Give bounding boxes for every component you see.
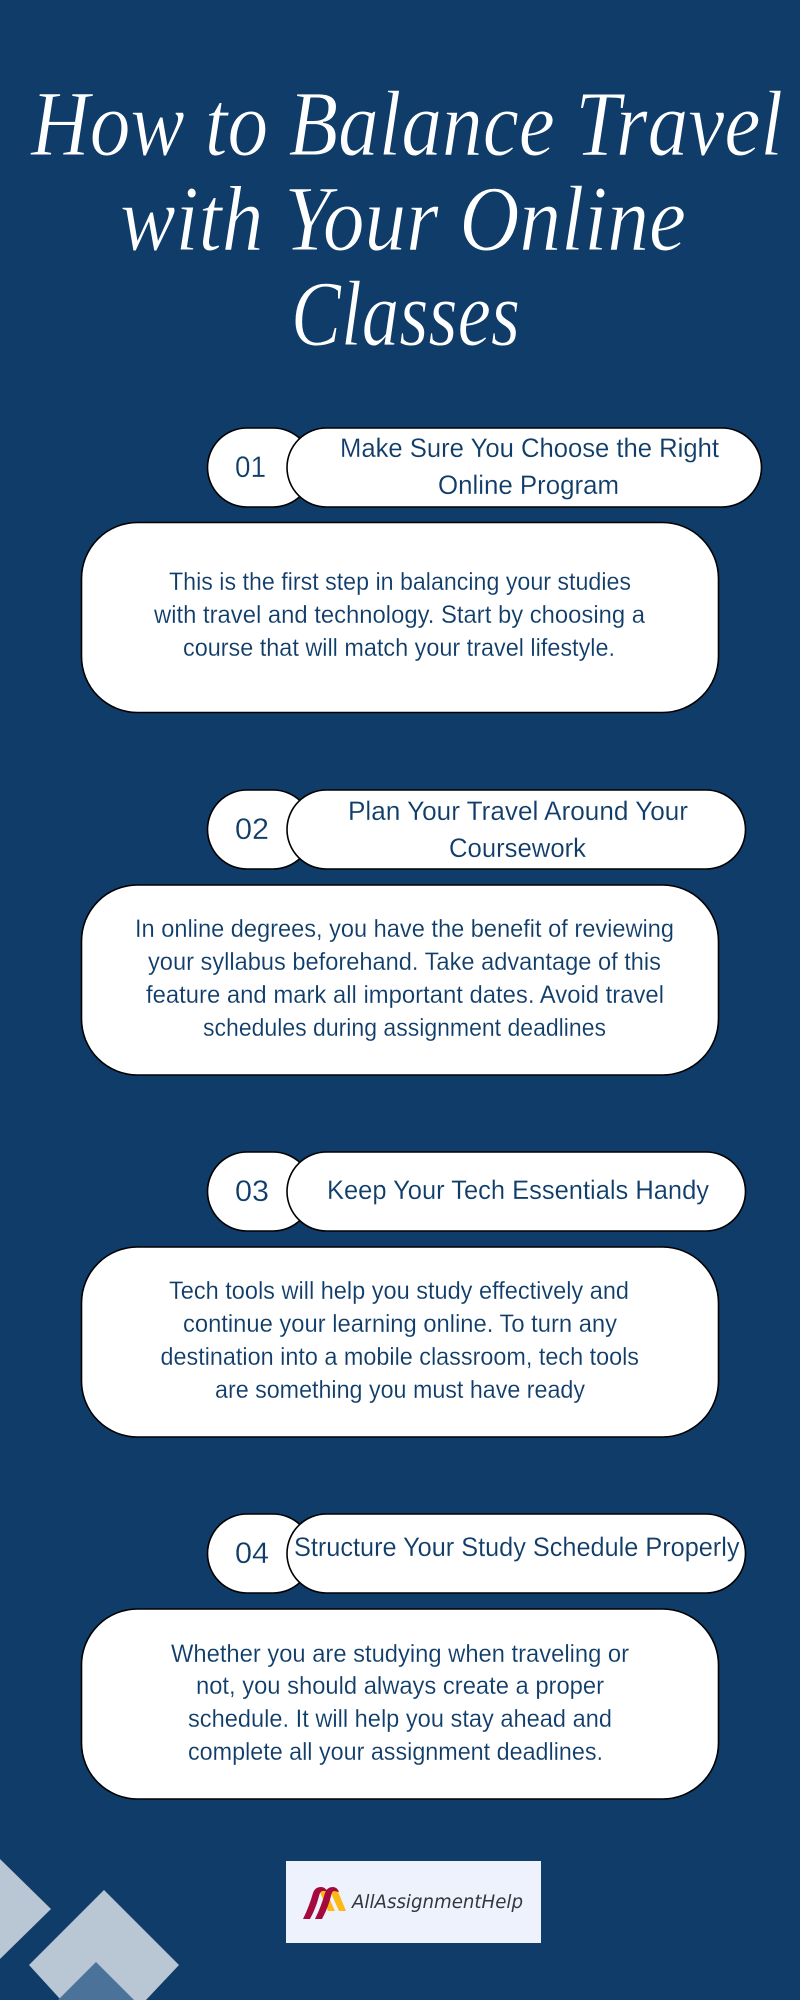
icon: logo mark — [303, 1887, 346, 1919]
body card 03: Tech tools will help you study effectively and — [169, 1277, 629, 1305]
body card 02: In online degrees, you have the benefit of reviewing — [135, 915, 674, 943]
body card 03: destination into a mobile classroom, tech tools — [160, 1343, 639, 1371]
body card 04: not, you should always create a proper — [196, 1672, 604, 1700]
body card 04: complete all your assignment deadlines. — [188, 1738, 603, 1766]
body card 04: schedule. It will help you stay ahead and — [188, 1705, 612, 1733]
body card 01: This is the first step in balancing your studies — [169, 568, 631, 596]
number badge 01: 01 — [235, 451, 266, 484]
heading pill 01: Online Program — [438, 470, 619, 500]
number badge 02 — [208, 790, 312, 869]
panel: step 04 — [82, 1514, 746, 1799]
body card 02 — [82, 885, 718, 1075]
title: Classes — [291, 263, 520, 366]
body card 04 — [82, 1609, 718, 1799]
number badge 04 — [208, 1514, 312, 1593]
number badge 04: 04 — [235, 1537, 269, 1570]
heading pill 04 — [287, 1514, 746, 1593]
heading pill 02 — [287, 790, 746, 869]
body card 02: schedules during assignment deadlines — [203, 1014, 606, 1042]
body card 03: are something you must have ready — [215, 1376, 585, 1404]
body card 03: continue your learning online. To turn any — [183, 1310, 617, 1338]
number badge 02: 02 — [235, 813, 269, 846]
heading pill 03 — [287, 1152, 746, 1231]
panel: step 03 — [82, 1152, 746, 1437]
decorative corner shapes — [0, 1859, 179, 2000]
heading pill 04: Structure Your Study Schedule Properly — [294, 1532, 740, 1562]
logo: AllAssignmentHelp: AllAssignmentHelp — [350, 1891, 523, 1913]
body card 02: feature and mark all important dates. Avoid travel — [146, 981, 664, 1009]
heading pill 02: Plan Your Travel Around Your — [348, 796, 688, 826]
panel: step 01 — [82, 428, 762, 712]
heading pill 01 — [287, 428, 762, 507]
panel: step 02 — [82, 790, 746, 1075]
body card 02: your syllabus beforehand. Take advantage of this — [148, 948, 661, 976]
number badge 01 — [208, 428, 312, 507]
title — [30, 73, 783, 366]
body card 01 — [82, 522, 718, 712]
body card 03 — [82, 1247, 718, 1437]
heading pill 03: Keep Your Tech Essentials Handy — [327, 1175, 709, 1205]
heading pill 01: Make Sure You Choose the Right — [340, 433, 719, 463]
body card 04: Whether you are studying when traveling or — [171, 1640, 629, 1668]
number badge 03: 03 — [235, 1175, 269, 1208]
heading pill 02: Coursework — [449, 833, 586, 863]
logo: AllAssignmentHelp — [286, 1861, 541, 1943]
body card 01: with travel and technology. Start by choosing a — [153, 601, 645, 629]
number badge 03 — [208, 1152, 312, 1231]
title: with Your Online — [120, 168, 686, 271]
body card 01: course that will match your travel lifestyle. — [183, 634, 615, 662]
